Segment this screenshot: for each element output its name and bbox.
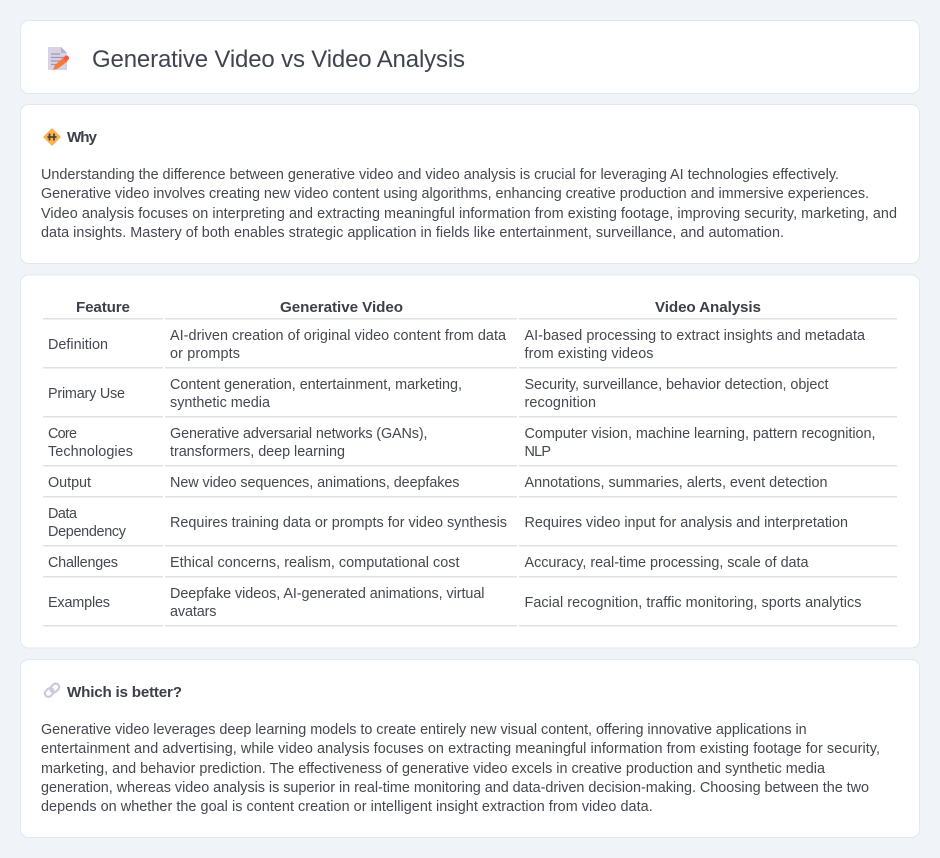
row: definition: AI-based processing to extract insights and metadata xyxy=(524,328,865,344)
heading: why: Why xyxy=(67,129,98,146)
which is better paragraph: generation, whereas video analysis is superior in real-time monitoring and data-driven decision-making. Choosing between the two xyxy=(41,780,869,796)
row: challenges: Challenges xyxy=(48,555,118,571)
panel: why xyxy=(20,104,920,264)
row: core technologies: NLP xyxy=(524,444,551,460)
which is better paragraph: Generative video leverages deep learning models to create entirely new visual content, offering innovative applications in xyxy=(41,722,807,738)
row: output: Output xyxy=(48,475,91,491)
row: primary use: recognition xyxy=(524,395,596,411)
row: core technologies: Computer vision, machine learning, pattern recognition, xyxy=(524,426,876,442)
why paragraph: Generative video involves creating new video content using algorithms, enhancing creative production and immersive experiences. xyxy=(41,186,869,202)
row: core technologies xyxy=(43,426,897,466)
row: examples: Deepfake videos, AI-generated animations, virtual xyxy=(170,586,484,602)
row: examples: Examples xyxy=(48,595,110,611)
row: challenges: Ethical concerns, realism, computational cost xyxy=(170,555,460,571)
row: primary use: Content generation, entertainment, marketing, xyxy=(170,377,462,393)
row: examples xyxy=(43,586,897,626)
table header row: Video Analysis xyxy=(655,299,761,316)
row: definition: Definition xyxy=(48,337,108,353)
icon: chain link xyxy=(43,682,61,698)
panel: title header xyxy=(20,20,920,94)
row: examples: avatars xyxy=(170,604,216,620)
why paragraph: Understanding the difference between generative video and video analysis is crucial for leveraging AI technologies effectively. xyxy=(41,167,839,183)
row: primary use xyxy=(43,377,897,418)
row: challenges xyxy=(43,555,897,578)
icon: document with pencil xyxy=(48,47,69,70)
row: examples: Facial recognition, traffic monitoring, sports analytics xyxy=(524,595,862,611)
which is better paragraph xyxy=(41,722,880,815)
panel: which is better xyxy=(20,660,920,838)
row: data dependency xyxy=(43,506,897,546)
row: core technologies: Core xyxy=(48,426,77,442)
which is better paragraph: depends on whether the goal is content creation or intelligent insight extraction from video data. xyxy=(41,799,653,815)
which is better paragraph: entertainment and advertising, while video analysis focuses on extracting meaningful information from existing footage for security, xyxy=(41,741,880,757)
table header row xyxy=(43,299,897,320)
table header row: Feature xyxy=(76,299,130,316)
row: challenges: Accuracy, real-time processing, scale of data xyxy=(524,555,808,571)
which is better paragraph: marketing, and behavior prediction. The effectiveness of generative video excels in creative production and synthetic media xyxy=(41,761,825,777)
row: core technologies: transformers, deep learning xyxy=(170,444,345,460)
row: primary use: Primary Use xyxy=(48,386,125,402)
title: Generative Video vs Video Analysis xyxy=(92,46,465,73)
panel: comparison table xyxy=(20,275,920,648)
row: definition: from existing videos xyxy=(524,346,654,362)
row: data dependency: Requires video input for analysis and interpretation xyxy=(524,515,848,531)
row: primary use: Security, surveillance, behavior detection, object xyxy=(524,377,828,393)
why paragraph: Video analysis focuses on interpreting and extracting meaningful information from existing footage, improving security, marketing, and xyxy=(41,206,897,222)
row: output: New video sequences, animations, deepfakes xyxy=(170,475,460,491)
row: core technologies: Generative adversarial networks (GANs), xyxy=(170,426,428,442)
row: output xyxy=(43,475,897,498)
row: definition xyxy=(43,328,897,368)
row: data dependency: Data xyxy=(48,506,77,522)
heading: which is better: Which is better? xyxy=(67,684,182,701)
row: definition: AI-driven creation of original video content from data xyxy=(170,328,506,344)
row: definition: or prompts xyxy=(170,346,240,362)
row: core technologies: Technologies xyxy=(48,444,133,460)
why paragraph xyxy=(41,167,897,241)
row: data dependency: Dependency xyxy=(48,524,127,540)
row: primary use: synthetic media xyxy=(170,395,270,411)
why paragraph: data insights. Mastery of both enables strategic application in fields like entertainment, surveillance, and automation. xyxy=(41,225,784,241)
row: data dependency: Requires training data or prompts for video synthesis xyxy=(170,515,507,531)
table header row: Generative Video xyxy=(280,299,403,316)
row: output: Annotations, summaries, alerts, event detection xyxy=(524,475,828,491)
icon: orange diamond sign xyxy=(44,129,60,145)
